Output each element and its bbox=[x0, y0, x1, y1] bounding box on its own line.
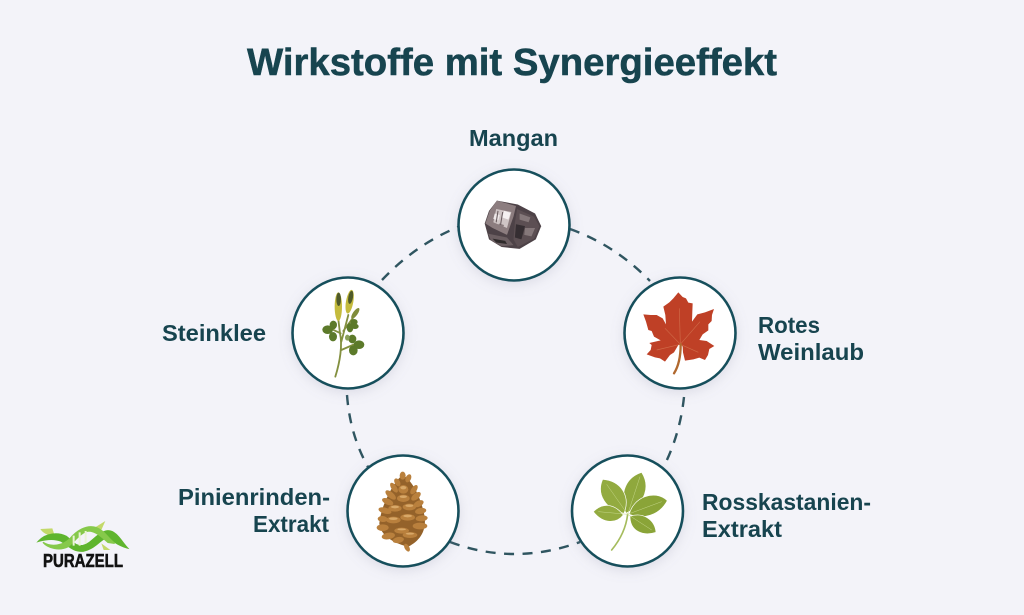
label: Rotes Weinlaub: Weinlaub bbox=[758, 339, 864, 365]
circle: Rosskastanien-Extrakt bbox=[572, 456, 683, 566]
node: Rotes Weinlaub bbox=[624, 278, 864, 388]
node: Rosskastanien-Extrakt bbox=[572, 456, 871, 566]
label: Rosskastanien-Extrakt: Rosskastanien- bbox=[702, 489, 871, 515]
label: Pinienrinden-Extrakt: Extrakt bbox=[253, 511, 329, 537]
circle: Steinklee bbox=[292, 278, 404, 388]
node: Mangan bbox=[458, 125, 570, 280]
label: Pinienrinden-Extrakt: Pinienrinden- bbox=[178, 484, 330, 510]
icon: red vine leaf bbox=[643, 292, 714, 373]
node: Pinienrinden-Extrakt bbox=[178, 456, 458, 566]
label: Rosskastanien-Extrakt: Extrakt bbox=[702, 516, 782, 542]
circle: Pinienrinden-Extrakt bbox=[348, 456, 458, 566]
icon: DNA leaf bbox=[39, 521, 127, 551]
icon: pine cone bbox=[377, 472, 428, 553]
logo: Purazell bbox=[39, 521, 127, 571]
label: Rotes Weinlaub: Rotes bbox=[758, 312, 820, 338]
circle: Mangan bbox=[458, 170, 570, 280]
title: Wirkstoffe mit Synergieeffekt bbox=[247, 42, 777, 84]
circle: Rotes Weinlaub bbox=[624, 278, 736, 388]
wordmark: PURAZELL bbox=[43, 551, 123, 571]
label: Steinklee: Steinklee bbox=[162, 320, 266, 346]
icon: horse chestnut leaf bbox=[593, 472, 667, 550]
node: Steinklee bbox=[162, 278, 404, 388]
icon: manganese mineral bbox=[485, 201, 541, 249]
label: Mangan: Mangan bbox=[469, 125, 558, 151]
dashed connecting ring bbox=[347, 227, 684, 554]
icon: sweet clover bbox=[322, 289, 364, 377]
